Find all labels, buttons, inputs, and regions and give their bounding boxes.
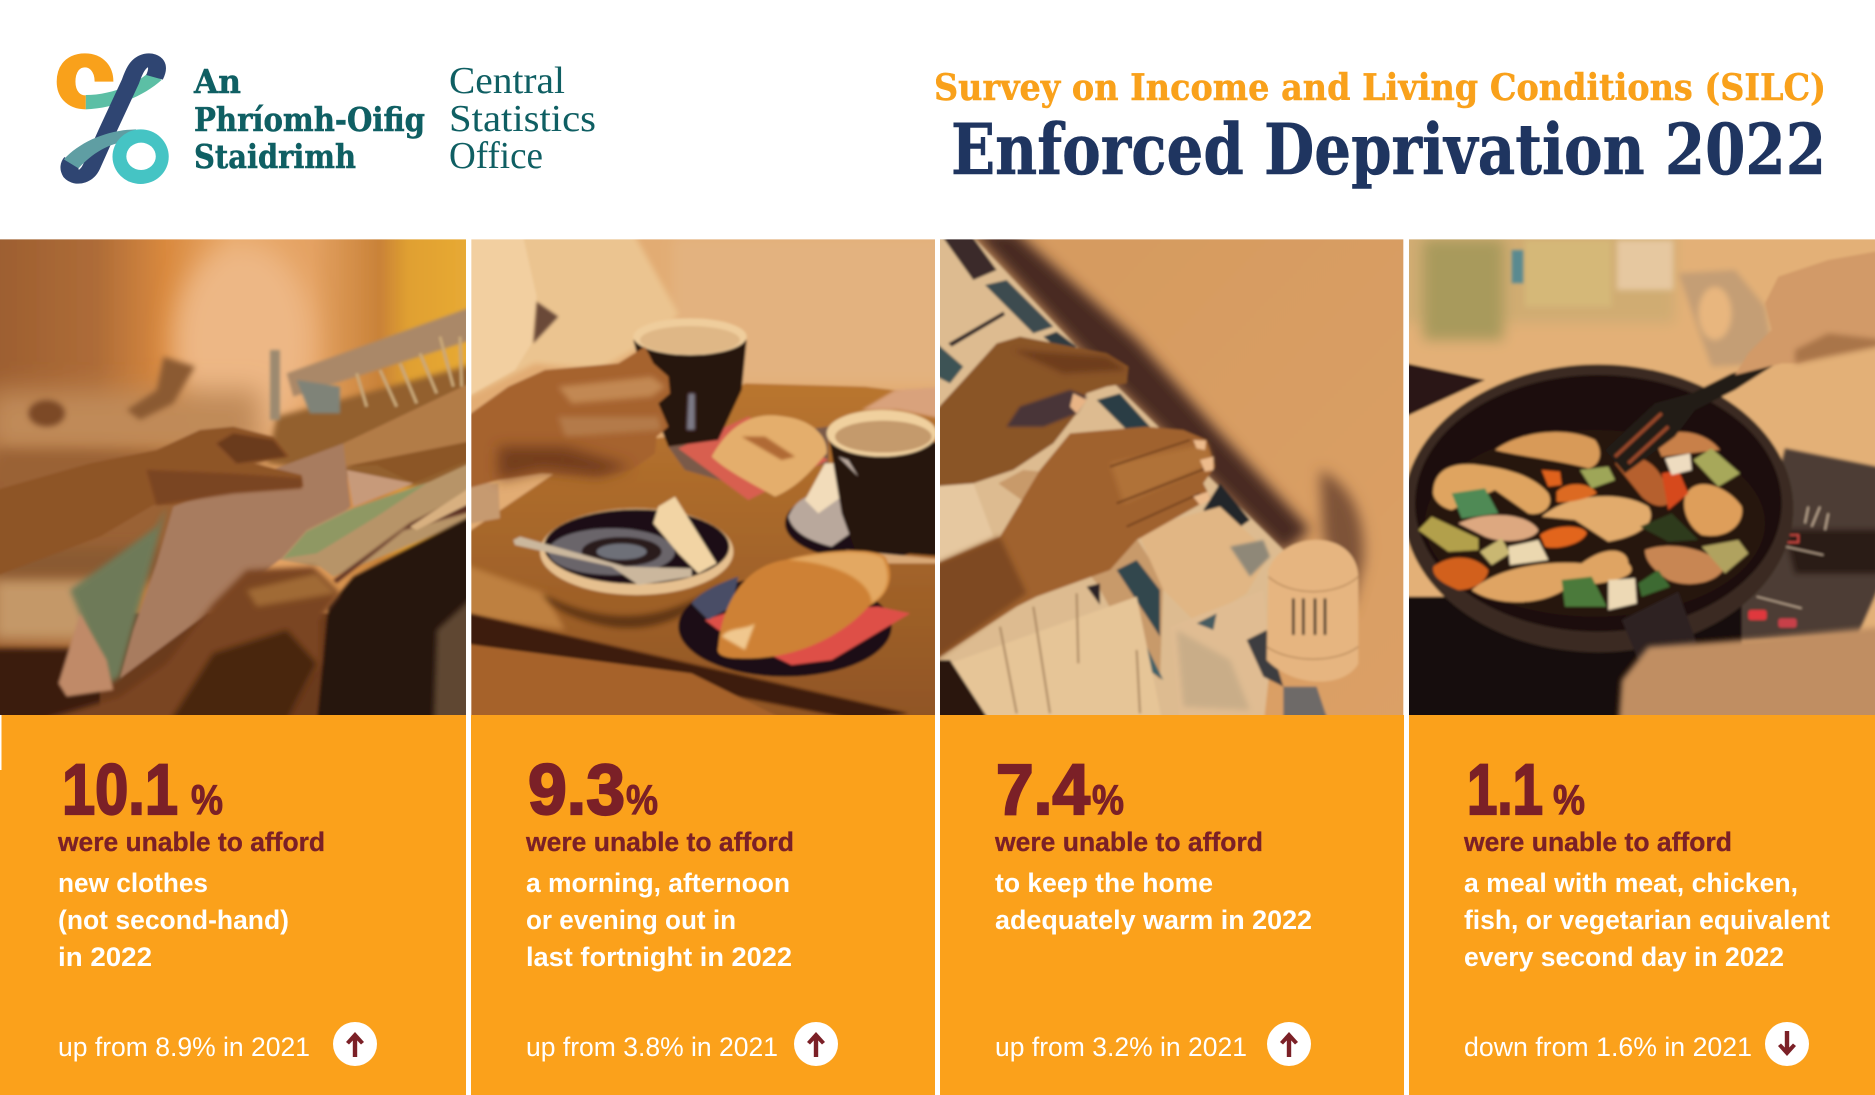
icon: down arrow (1765, 1022, 1809, 1066)
pan (1403, 364, 1793, 652)
description: a morning, afternoon (526, 868, 790, 898)
logo English name: Statistics (449, 98, 596, 140)
food (1433, 464, 1550, 514)
logo English name: Office (449, 135, 543, 177)
panel: regular meal (1398, 230, 1875, 1095)
label: were unable to afford (1463, 827, 1732, 857)
description: new clothes (58, 868, 208, 898)
photo: hands warming on a radiator (930, 230, 1417, 727)
description: (not second-hand) (58, 905, 289, 935)
front saucer (540, 508, 733, 595)
upper hand (1735, 250, 1875, 375)
icon: up arrow (333, 1022, 377, 1066)
lower hand (930, 427, 1215, 663)
photo: prawns and vegetables in a frying pan (1398, 230, 1875, 727)
stat: 9.3%: 9.3 (528, 751, 625, 830)
label: were unable to afford (57, 827, 325, 857)
upper hand (930, 337, 1128, 487)
thermostat (1267, 540, 1358, 682)
description: adequately warm in 2022 (995, 905, 1312, 935)
title block (934, 67, 1826, 191)
hand (462, 347, 670, 490)
panel: morning or evening out (462, 230, 948, 1095)
logo Irish name: An (193, 62, 241, 101)
back plate (668, 427, 828, 483)
panel: keeping the home warm (930, 230, 1417, 1095)
comparison with 2021: up from 8.9% in 2021 (58, 1032, 310, 1062)
description: last fortnight in 2022 (526, 942, 792, 972)
hand-held cup (633, 340, 747, 447)
description: in 2022 (58, 942, 152, 972)
logo Irish name: Phríomh-Oifig (194, 100, 425, 139)
logo Irish name (193, 62, 425, 176)
label: were unable to afford (994, 827, 1263, 857)
front croissant (678, 577, 892, 677)
logo symbol (64, 60, 169, 184)
comparison with 2021: up from 3.8% in 2021 (526, 1032, 778, 1062)
description (1464, 868, 1830, 972)
photo: hands browsing a clothes rail (0, 230, 477, 728)
stat: 10.1%: % (191, 776, 223, 823)
handle (1622, 592, 1697, 660)
description: or evening out in (526, 905, 736, 935)
stat: 9.3%: % (626, 776, 658, 823)
comparison with 2021: down from 1.6% in 2021 (1464, 1032, 1752, 1062)
photo: coffee and croissants on a table (462, 230, 948, 727)
spatula (1605, 360, 1782, 473)
card: outings stat (471, 715, 935, 1095)
description (526, 868, 792, 972)
description (995, 868, 1312, 935)
right saucer and cup (784, 506, 909, 557)
stat: 7.4%: % (1092, 776, 1124, 823)
logo English name: Central (449, 60, 565, 102)
card: clothes stat (0, 715, 466, 1095)
card: meal stat (1409, 715, 1875, 1095)
stat: 10.1%: 10.1 (62, 751, 178, 830)
icon: up arrow (1267, 1022, 1311, 1066)
survey subtitle: Survey on Income and Living Conditions (SILC) (934, 67, 1826, 109)
card: warmth stat (940, 715, 1404, 1095)
description: fish, or vegetarian equivalent (1464, 905, 1830, 935)
icon: up arrow (794, 1022, 838, 1066)
logo: Central Statistics Office (64, 60, 596, 184)
description: a meal with meat, chicken, (1464, 868, 1798, 898)
stat: 1.1%: % (1553, 776, 1585, 823)
panel: new clothes (0, 230, 477, 1095)
description: to keep the home (995, 868, 1213, 898)
description: every second day in 2022 (1464, 942, 1784, 972)
description (58, 868, 289, 972)
logo Irish name: Staidrimh (194, 137, 356, 176)
lower hand (1618, 627, 1875, 727)
stat: 7.4%: 7.4 (996, 751, 1090, 830)
label: were unable to afford (525, 827, 794, 857)
logo English name (449, 60, 596, 177)
comparison with 2021: up from 3.2% in 2021 (995, 1032, 1247, 1062)
stat: 1.1%: 1.1 (1467, 751, 1543, 830)
